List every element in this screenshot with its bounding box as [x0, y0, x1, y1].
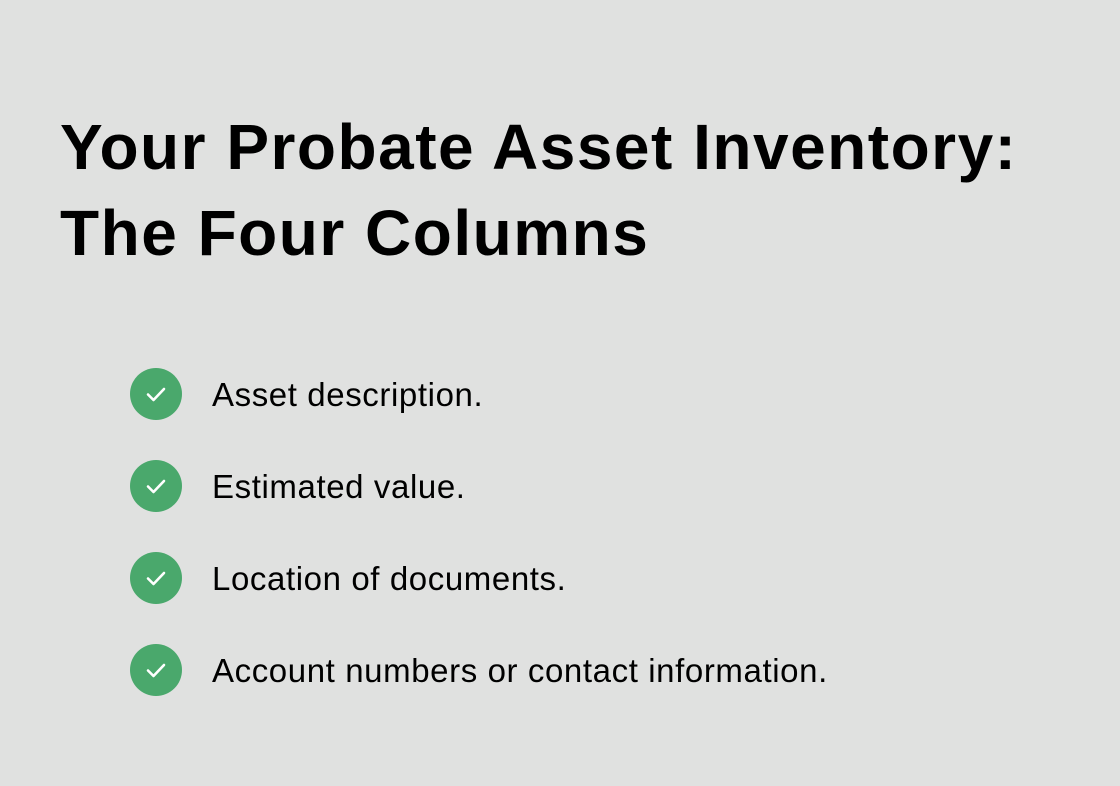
- title: [60, 111, 1017, 269]
- title: Your Probate Asset Inventory:: [60, 111, 1017, 183]
- icon: check: [130, 644, 182, 696]
- text: Asset description.: [212, 376, 483, 413]
- text: Account numbers or contact information.: [212, 652, 828, 689]
- text: Location of documents.: [212, 560, 566, 597]
- icon: check: [130, 460, 182, 512]
- list item: estimated value: [130, 460, 466, 512]
- list item: account numbers: [130, 644, 828, 696]
- list item: asset description: [130, 368, 483, 420]
- icon: check: [130, 368, 182, 420]
- title: The Four Columns: [60, 197, 649, 269]
- list item: location of documents: [130, 552, 566, 604]
- text: Estimated value.: [212, 468, 466, 505]
- icon: check: [130, 552, 182, 604]
